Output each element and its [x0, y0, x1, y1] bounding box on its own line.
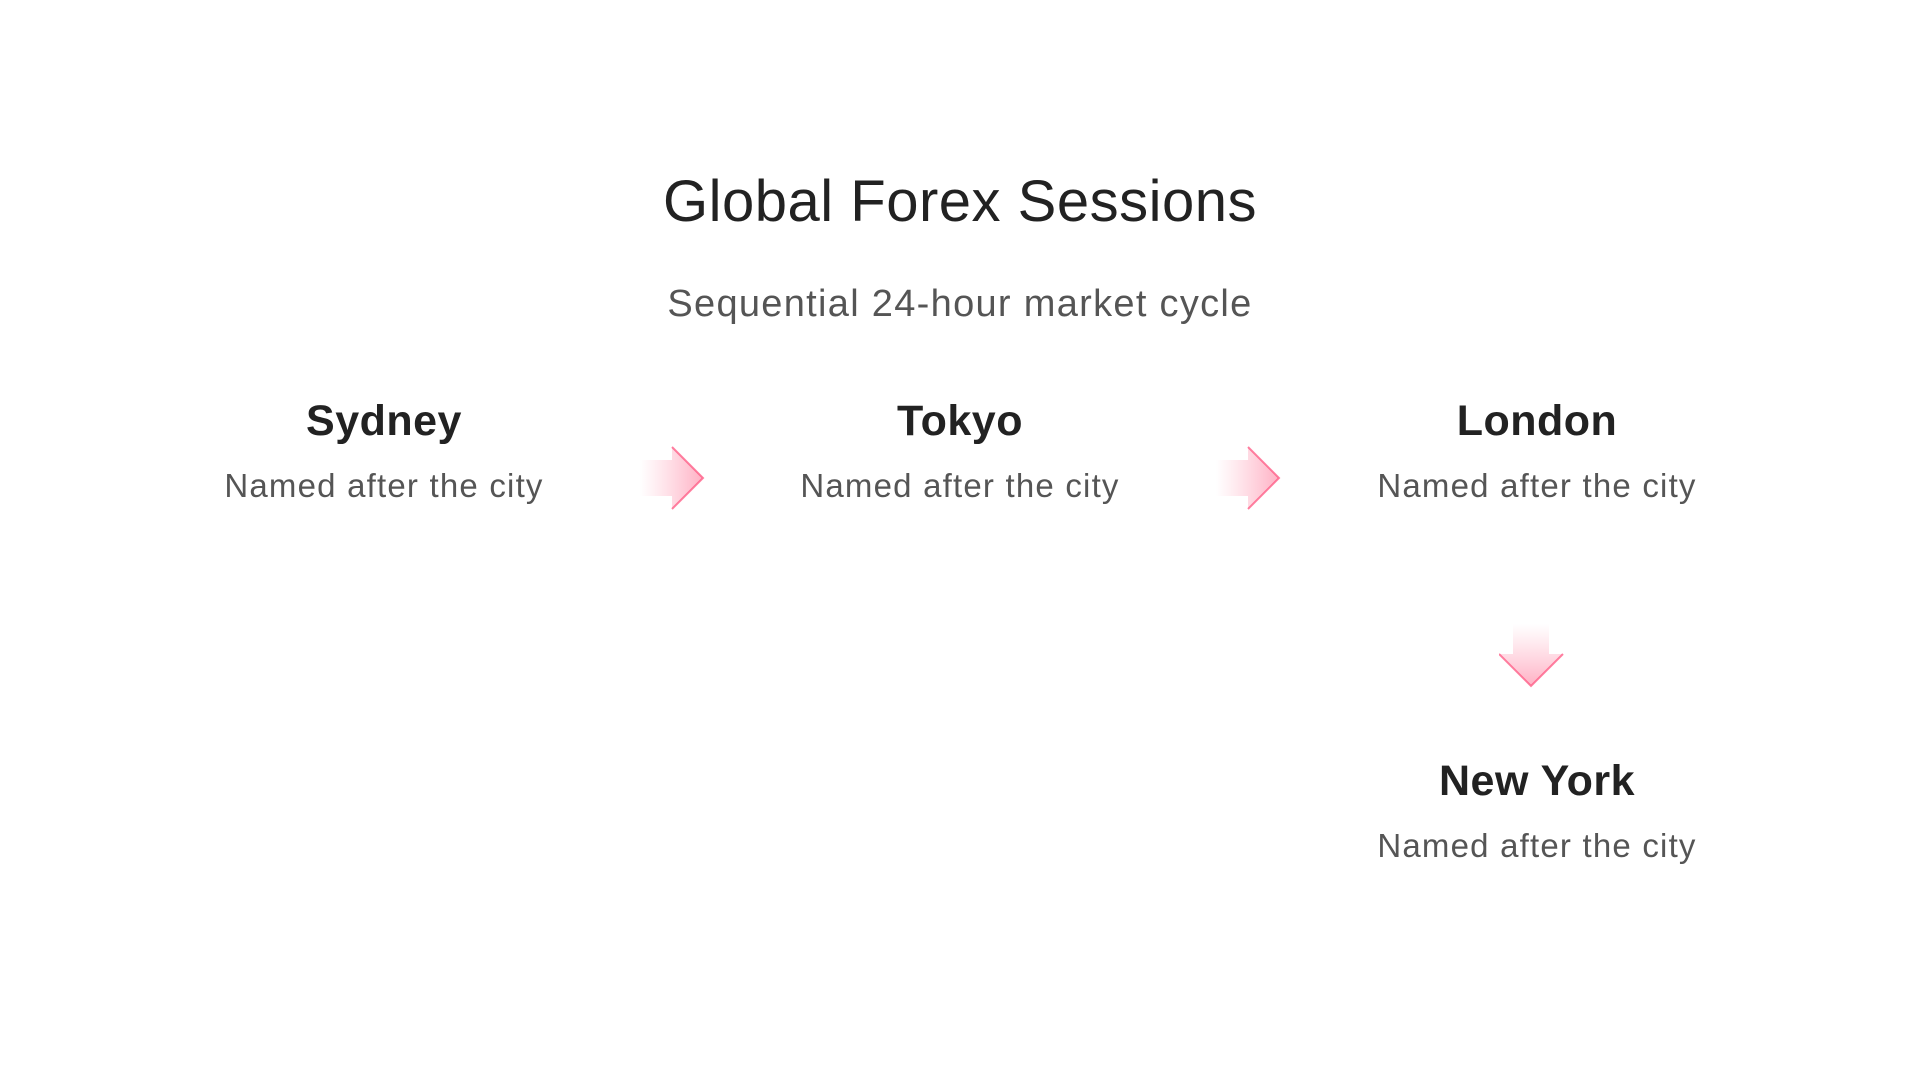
step: New York — [1377, 757, 1697, 864]
step: Tokyo — [800, 397, 1120, 504]
step: London — [1377, 397, 1697, 504]
step: London: London — [1457, 397, 1617, 445]
title: Global Forex Sessions — [663, 169, 1257, 234]
arrow: London to New York — [1499, 632, 1564, 688]
step: Sydney: Sydney — [306, 397, 462, 445]
subtitle: Sequential 24-hour market cycle — [667, 283, 1253, 325]
step: Sydney: Named after the city — [224, 467, 544, 504]
step: New York: Named after the city — [1377, 827, 1697, 864]
arrow: Tokyo to London — [1224, 446, 1280, 510]
arrow: Sydney to Tokyo — [648, 446, 704, 510]
step: Sydney — [224, 397, 544, 504]
step: Tokyo: Named after the city — [800, 467, 1120, 504]
step: London: Named after the city — [1377, 467, 1697, 504]
step: Tokyo: Tokyo — [897, 397, 1023, 445]
step: New York: New York — [1439, 757, 1635, 805]
